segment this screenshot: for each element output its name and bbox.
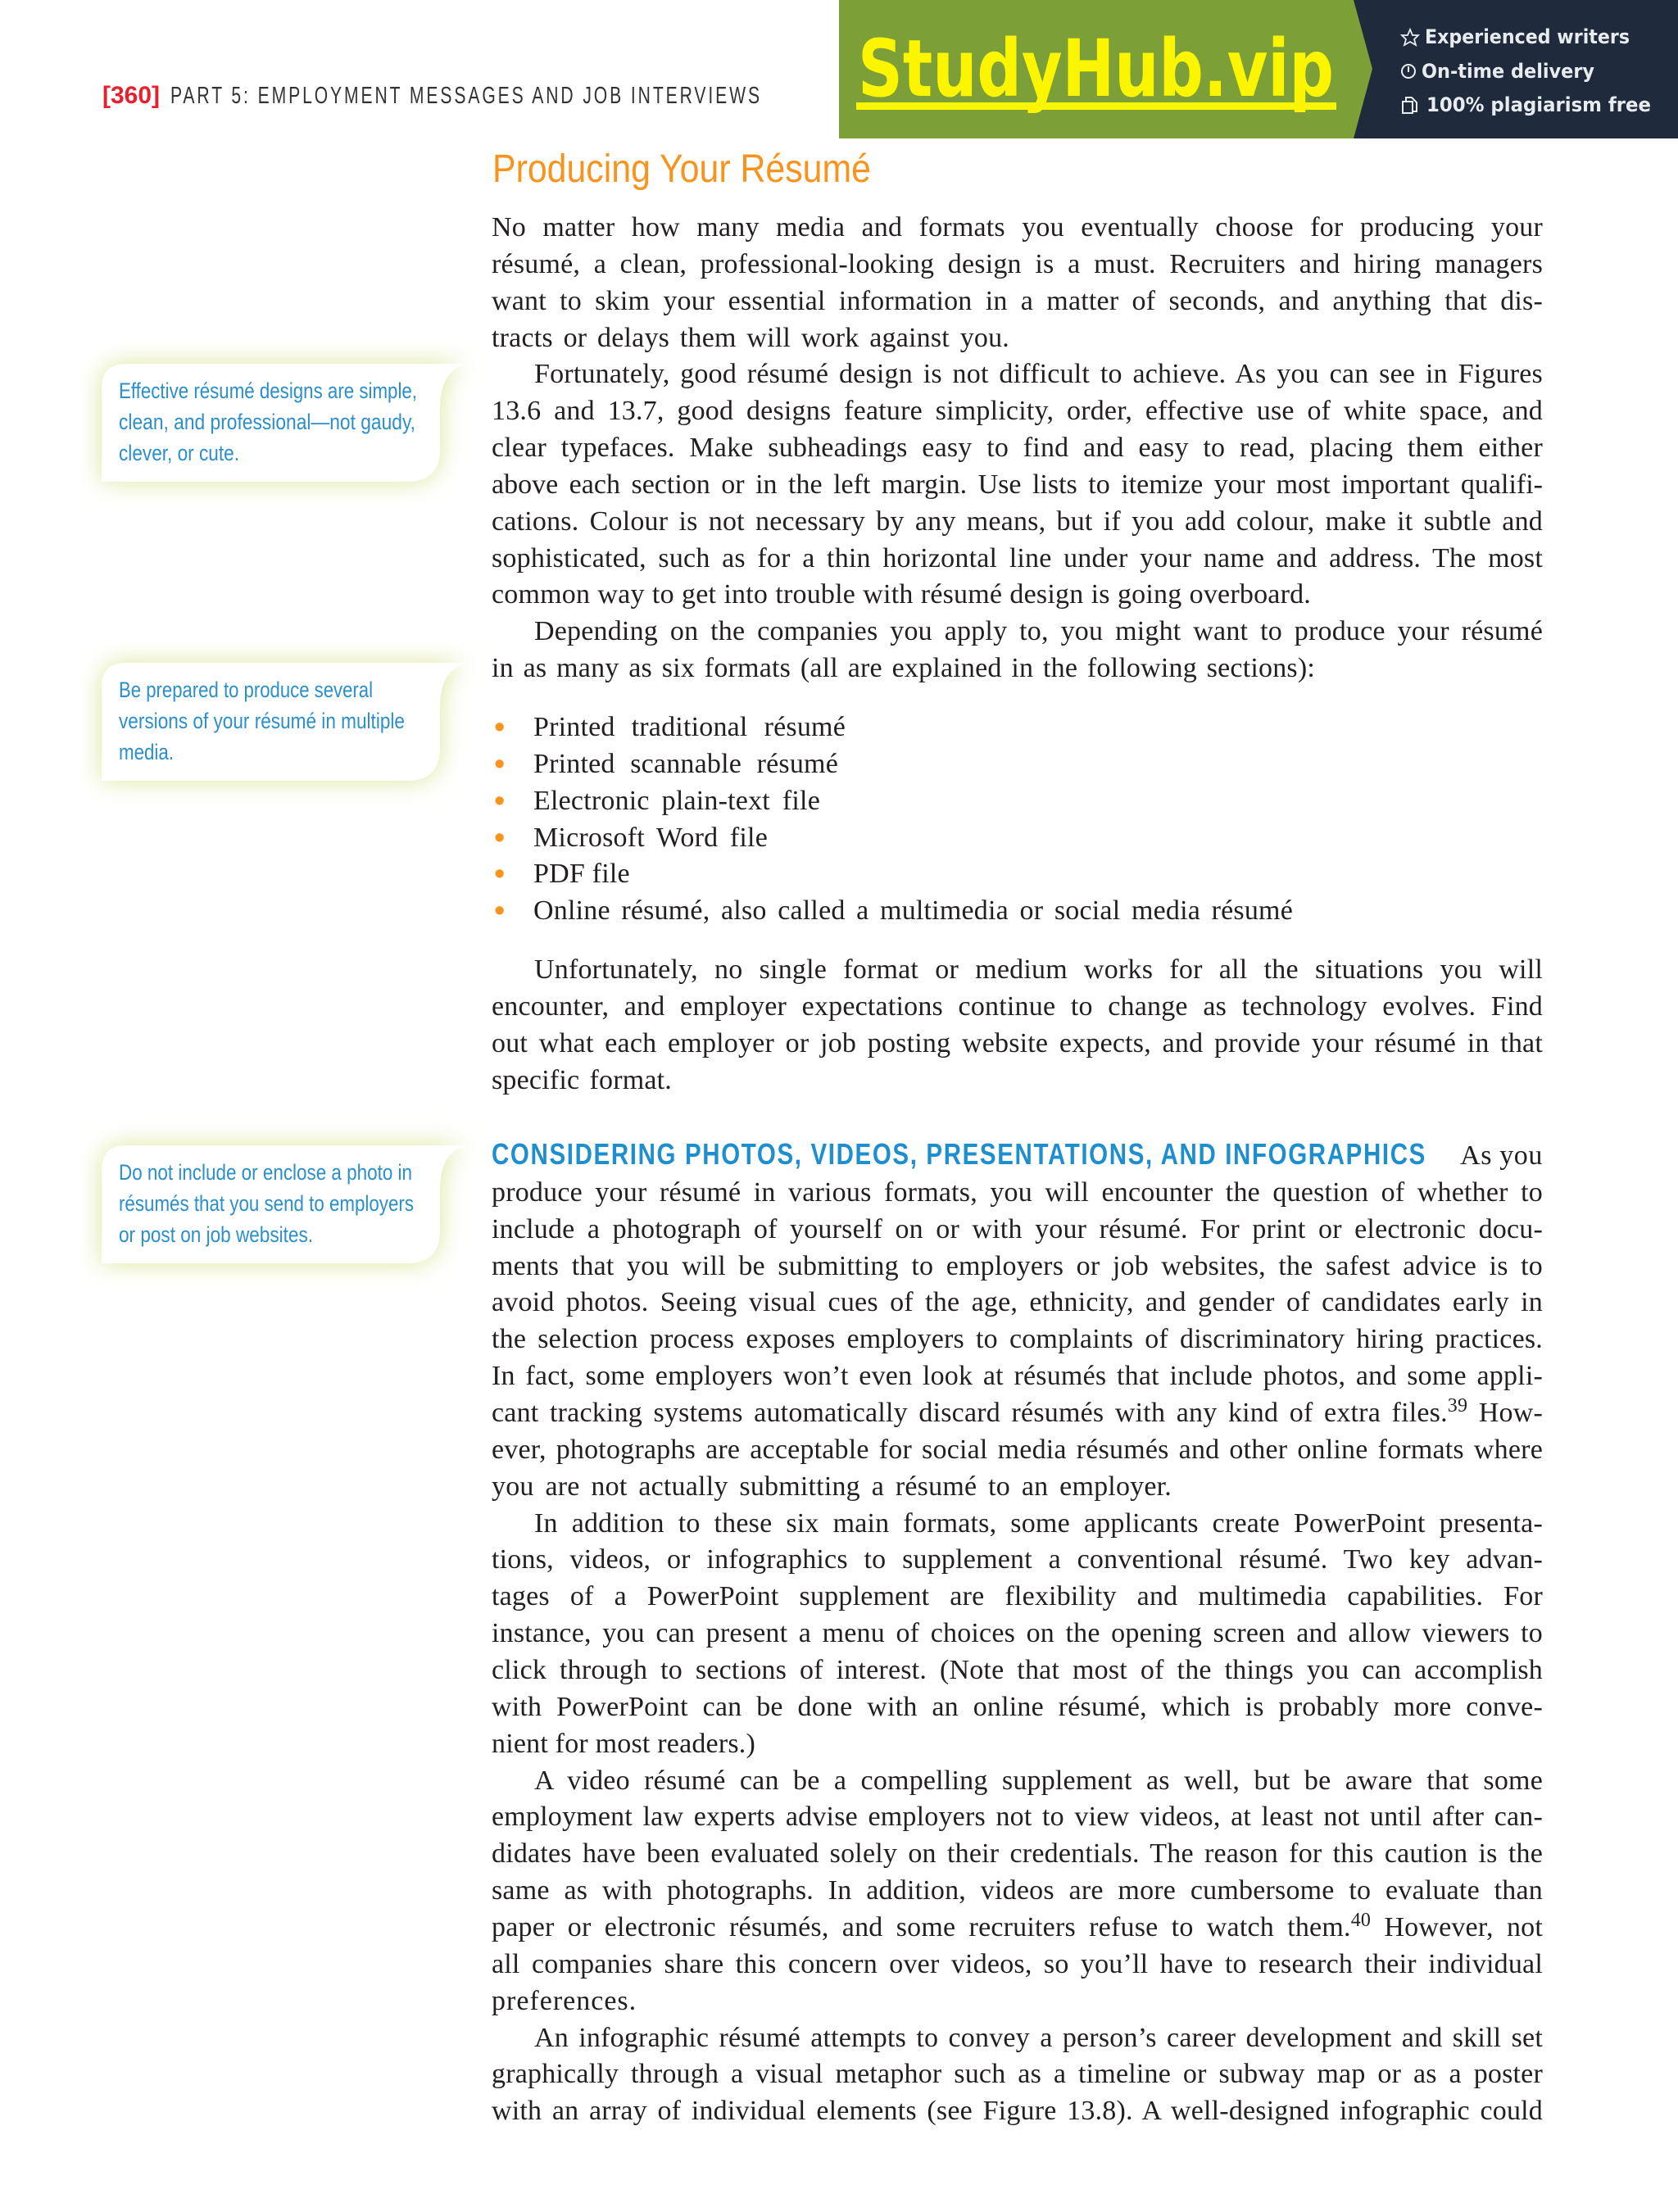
- paragraph: good design: above each section or in the left margin. Use lists to itemize your most important qualifi-: [492, 469, 1543, 500]
- bullet list: formats: PDF file: [533, 859, 630, 889]
- paragraph: no single format: [492, 954, 1543, 1095]
- bullet list: formats: •: [494, 784, 506, 818]
- banner: StudyHub.vip: [839, 0, 1678, 138]
- paragraph: powerpoint: [492, 1507, 1543, 1759]
- icon: copy document: [1403, 97, 1417, 113]
- paragraph: considering photos: avoid photos. Seeing visual cues of the age, ethnicity, and gender of candidates early in: [492, 1287, 1543, 1317]
- paragraph: no single format: encounter, and employer expectations continue to change as technology evolves. Find: [492, 991, 1543, 1022]
- bullet list: formats: •: [494, 747, 506, 782]
- paragraph: good design: [492, 359, 1543, 610]
- paragraph: powerpoint: with PowerPoint can be done with an online résumé, which is probably more conve-: [492, 1692, 1543, 1722]
- bullet list: formats: Microsoft Word file: [533, 823, 768, 853]
- paragraph: good design: clear typefaces. Make subheadings easy to find and easy to read, placing them either: [492, 433, 1543, 463]
- paragraph: powerpoint: click through to sections of interest. (Note that most of the things you can accomplish: [492, 1655, 1543, 1685]
- banner feature: plagiarism free: 100% plagiarism free: [1426, 93, 1651, 116]
- callout: no photos: Do not include or enclose a photo in: [119, 1160, 412, 1185]
- icon: clock: [1402, 65, 1415, 78]
- paragraph: considering photos: [492, 1137, 1543, 1502]
- page number: [360]: [102, 82, 160, 109]
- banner feature: experienced writers: Experienced writers: [1425, 25, 1630, 48]
- paragraph: infographic resume: graphically through a visual metaphor such as a timeline or subway map or as a poster: [492, 2059, 1543, 2089]
- paragraph: good design: sophisticated, such as for a thin horizontal line under your name and address. The most: [492, 543, 1543, 573]
- paragraph: intro: No matter how many media and formats you eventually choose for producing your: [492, 212, 1543, 243]
- paragraph: no single format: specific format.: [492, 1065, 672, 1095]
- paragraph: infographic resume: with an array of individual elements (see Figure 13.8). A well-designed infographic could: [492, 2096, 1543, 2126]
- bullet list: formats: [494, 710, 1293, 928]
- icon: star: [1402, 29, 1418, 45]
- bullet list: formats: Electronic plain-text file: [533, 786, 820, 816]
- callout: effective designs: [102, 364, 472, 482]
- paragraph: powerpoint: tages of a PowerPoint supplement are flexibility and multimedia capabilities. For: [492, 1581, 1543, 1611]
- paragraph: no single format: out what each employer or job posting website expects, and provide your résumé in that: [492, 1028, 1543, 1058]
- paragraph: good design: common way to get into trouble with résumé design is going overboard.: [492, 579, 1311, 610]
- paragraph: considering photos: the selection process exposes employers to complaints of discriminatory hiring practices.: [492, 1324, 1543, 1354]
- paragraph: powerpoint: tions, videos, or infographics to supplement a conventional résumé. Two key advan-: [492, 1544, 1543, 1575]
- paragraph: good design: cations. Colour is not necessary by any means, but if you add colour, make it subtle and: [492, 506, 1543, 537]
- callout: effective designs: clever, or cute.: [119, 441, 239, 465]
- paragraph: considering photos: ever, photographs are acceptable for social media résumés and other online formats where: [492, 1435, 1543, 1465]
- running header: PART 5: EMPLOYMENT MESSAGES AND JOB INTERVIEWS: [170, 83, 762, 109]
- callout: no photos: résumés that you send to employers: [119, 1191, 414, 1216]
- paragraph: considering photos: include a photograph of yourself on or with your résumé. For print or electronic docu-: [492, 1214, 1543, 1244]
- paragraph: good design: Fortunately, good résumé design is not difficult to achieve. As you can see in Figures: [534, 359, 1543, 389]
- paragraph: video resume: employment law experts advise employers not to view videos, at least not until after can-: [492, 1802, 1543, 1832]
- bullet list: formats: Printed traditional résumé: [533, 712, 846, 742]
- paragraph: intro: résumé, a clean, professional-looking design is a must. Recruiters and hiring managers: [492, 249, 1543, 279]
- paragraph: powerpoint: In addition to these six main formats, some applicants create PowerPoint presenta-: [534, 1507, 1543, 1539]
- bullet list: formats: Online résumé, also called a multimedia or social media résumé: [533, 895, 1293, 926]
- paragraph: powerpoint: instance, you can present a menu of choices on the opening screen and allow viewers to: [492, 1618, 1543, 1648]
- paragraph: video resume: A video résumé can be a compelling supplement as well, but be aware that some: [534, 1765, 1543, 1796]
- paragraph: video resume: [492, 1765, 1543, 2016]
- paragraph: considering photos: CONSIDERING PHOTOS, VIDEOS, PRESENTATIONS, AND INFOGRAPHICS: [492, 1137, 1426, 1171]
- callout: multiple versions: versions of your résumé in multiple: [119, 709, 405, 733]
- paragraph: video resume: same as with photographs. In addition, videos are more cumbersome to evaluate than: [492, 1875, 1543, 1906]
- paragraph: intro: want to skim your essential information in a matter of seconds, and anything that dis-: [492, 286, 1543, 316]
- paragraph: good design: 13.6 and 13.7, good designs feature simplicity, order, effective use of white space, and: [492, 396, 1543, 426]
- paragraph: six formats: Depending on the companies you apply to, you might want to produce your résumé: [534, 616, 1543, 646]
- paragraph: powerpoint: nient for most readers.): [492, 1729, 755, 1759]
- paragraph: infographic resume: [492, 2022, 1543, 2126]
- paragraph: video resume: paper or electronic résumés, and some recruiters refuse to watch them.40 However, not: [492, 1910, 1543, 1942]
- callout: multiple versions: [102, 663, 472, 781]
- bullet list: formats: •: [494, 710, 506, 745]
- paragraph: considering photos: produce your résumé in various formats, you will encounter the question of whether to: [492, 1177, 1543, 1208]
- callout: no photos: [102, 1145, 472, 1263]
- callout: multiple versions: Be prepared to produce several: [119, 678, 373, 702]
- banner feature: on-time delivery: On-time delivery: [1422, 60, 1594, 83]
- callout: multiple versions: media.: [119, 740, 174, 764]
- paragraph: considering photos: you are not actually submitting a résumé to an employer.: [492, 1471, 1172, 1502]
- paragraph: considering photos: ments that you will be submitting to employers or job websites, the safest advice is to: [492, 1251, 1543, 1281]
- paragraph: video resume: preferences.: [492, 1986, 637, 2016]
- paragraph: intro: [492, 212, 1543, 353]
- paragraph: six formats: in as many as six formats (all are explained in the following sections):: [492, 653, 1315, 683]
- callout: effective designs: clean, and professional—not gaudy,: [119, 410, 415, 434]
- bullet list: formats: •: [494, 894, 506, 928]
- paragraph: six formats: [492, 616, 1543, 683]
- paragraph: intro: tracts or delays them will work against you.: [492, 323, 1009, 353]
- paragraph: no single format: Unfortunately, no single format or medium works for all the situations you will: [534, 954, 1543, 985]
- callout: effective designs: Effective résumé designs are simple,: [119, 378, 417, 403]
- banner logo text: StudyHub.vip: [858, 23, 1334, 115]
- callout: no photos: or post on job websites.: [119, 1222, 313, 1247]
- bullet list: formats: •: [494, 821, 506, 855]
- paragraph: considering photos: In fact, some employers won’t even look at résumés that include photos, and some appli-: [492, 1361, 1543, 1391]
- paragraph: considering photos: cant tracking systems automatically discard résumés with any kind of extra files.39 How-: [492, 1395, 1543, 1428]
- paragraph: video resume: all companies share this concern over videos, so you’ll have to research their individual: [492, 1949, 1543, 1979]
- section title: Producing Your Résumé: [492, 147, 871, 191]
- bullet list: formats: •: [494, 857, 506, 891]
- paragraph: video resume: didates have been evaluated solely on their credentials. The reason for this caution is the: [492, 1838, 1543, 1869]
- bullet list: formats: Printed scannable résumé: [533, 749, 838, 779]
- paragraph: considering photos: As you: [1460, 1140, 1543, 1171]
- paragraph: infographic resume: An infographic résumé attempts to convey a person’s career development and skill set: [534, 2022, 1543, 2053]
